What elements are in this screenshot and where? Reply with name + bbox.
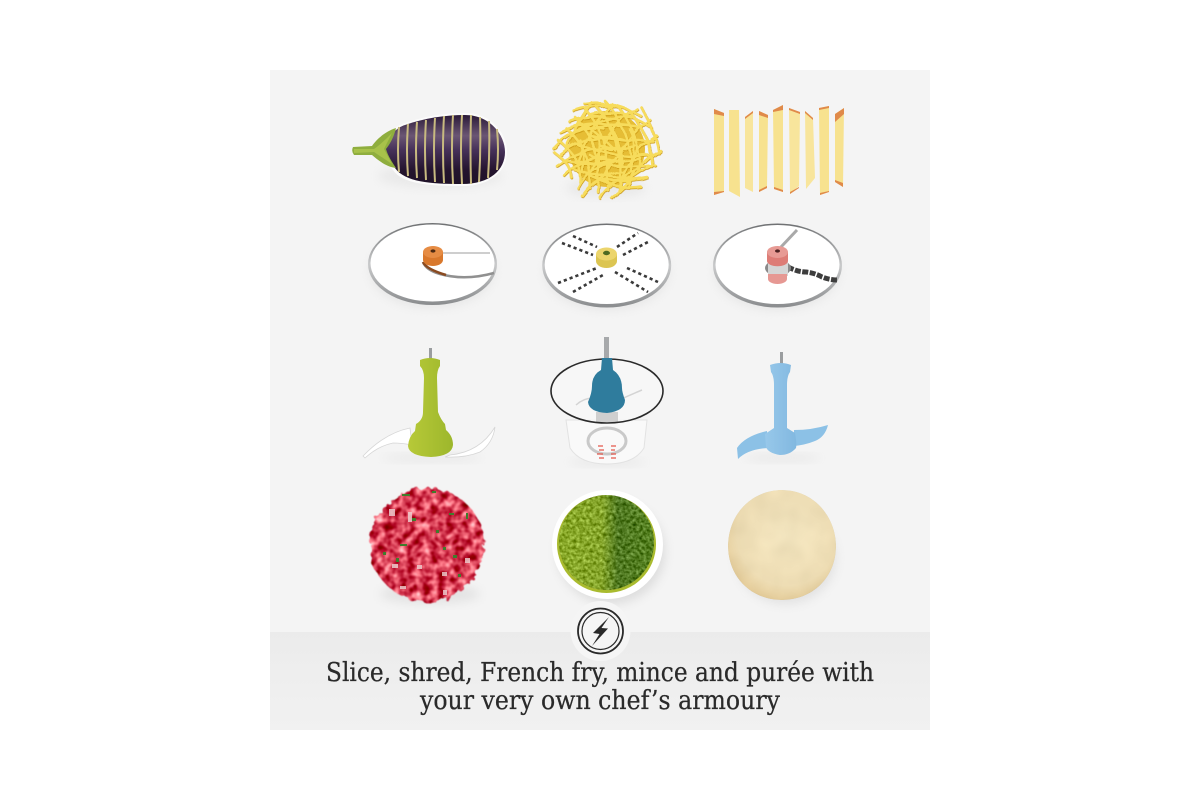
icon: dough ball [728,490,836,604]
fry 7 [805,111,815,189]
icon: french fries [714,105,844,197]
icon: french fry disc [713,224,842,310]
icon: minced meat [370,488,484,604]
fry 2 [729,110,740,197]
icon: mini bowl with blade [551,337,663,466]
icon: sliced eggplant [352,113,507,188]
panel: caption band [270,632,930,730]
icon: pesto bowl [552,490,665,604]
fry 4 [759,111,768,192]
fry 6 [789,108,800,194]
caption text: Slice, shred, French fry, mince and purée with [326,658,874,688]
fry 5 [773,105,783,192]
caption text [326,658,874,716]
fry 9 [835,108,844,187]
icon: blue dough blade [737,352,828,462]
icon: shredded cheese [553,100,660,198]
icon: shredding disc [542,224,671,310]
fry 1 [714,109,724,195]
panel: background [270,70,930,730]
caption text: your very own chef’s armoury [419,686,780,716]
fry 3 [745,111,753,192]
icon: slicing disc [368,223,497,308]
icon: green chopping blade [363,348,495,462]
fry 8 [819,106,829,195]
icon: lightning bolt badge [570,601,630,661]
